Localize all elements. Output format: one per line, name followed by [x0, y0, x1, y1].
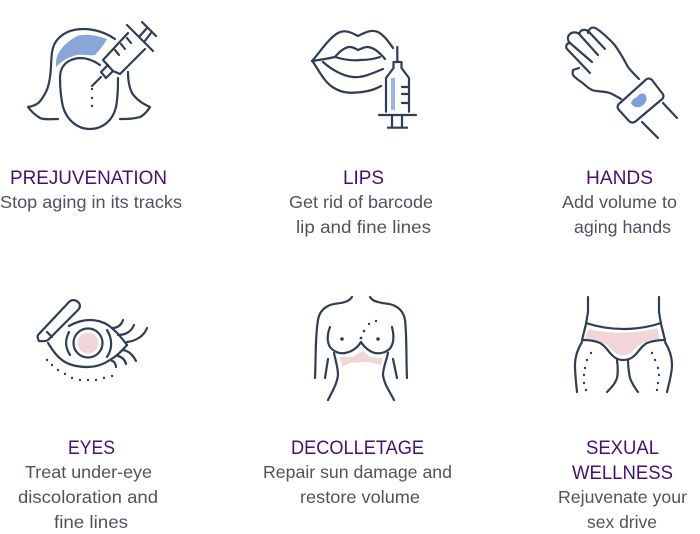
text: sexual wellness description: Rejuvenate your	[558, 487, 687, 507]
text: hands description: aging hands	[574, 217, 671, 237]
icon: hand with heart	[566, 28, 677, 138]
panel: hands	[562, 28, 677, 237]
text: eyes description: Treat under-eye	[25, 462, 152, 482]
panel: eyes	[18, 300, 158, 532]
text: prejuvenation description: Stop aging in its tracks	[0, 192, 182, 212]
text: eyes description	[18, 462, 158, 532]
heading: lips: LIPS	[343, 167, 384, 189]
text: hands description	[562, 192, 677, 237]
heading: sexual wellness: WELLNESS	[572, 462, 673, 484]
text: decolletage description: Repair sun damage and	[263, 462, 452, 482]
text: lips description: Get rid of barcode	[289, 192, 433, 212]
panel: decolletage	[263, 297, 452, 507]
icon: chest	[315, 297, 407, 400]
icon: face with syringe	[28, 22, 156, 129]
panel: sexual wellness	[558, 297, 687, 532]
panel: lips	[289, 31, 433, 237]
text: eyes description: fine lines	[54, 512, 128, 532]
text: eyes description: discoloration and	[18, 487, 158, 507]
heading: sexual wellness	[572, 437, 673, 484]
heading: sexual wellness: SEXUAL	[586, 437, 659, 459]
heading: hands: HANDS	[586, 167, 653, 189]
text: lips description: lip and fine lines	[296, 217, 431, 237]
text: sexual wellness description: sex drive	[587, 512, 657, 532]
text: decolletage description: restore volume	[300, 487, 420, 507]
icon: hips and underwear	[575, 297, 672, 392]
text: lips description	[289, 192, 433, 237]
icon: eye with pen	[38, 300, 147, 381]
text: decolletage description	[263, 462, 452, 507]
heading: decolletage: DECOLLETAGE	[291, 437, 424, 459]
panel: prejuvenation	[0, 22, 182, 212]
text: hands description: Add volume to	[562, 192, 677, 212]
icon: lips with syringe	[312, 31, 416, 128]
heading: eyes: EYES	[68, 437, 115, 459]
heading: prejuvenation: PREJUVENATION	[10, 167, 167, 189]
text: sexual wellness description	[558, 487, 687, 532]
